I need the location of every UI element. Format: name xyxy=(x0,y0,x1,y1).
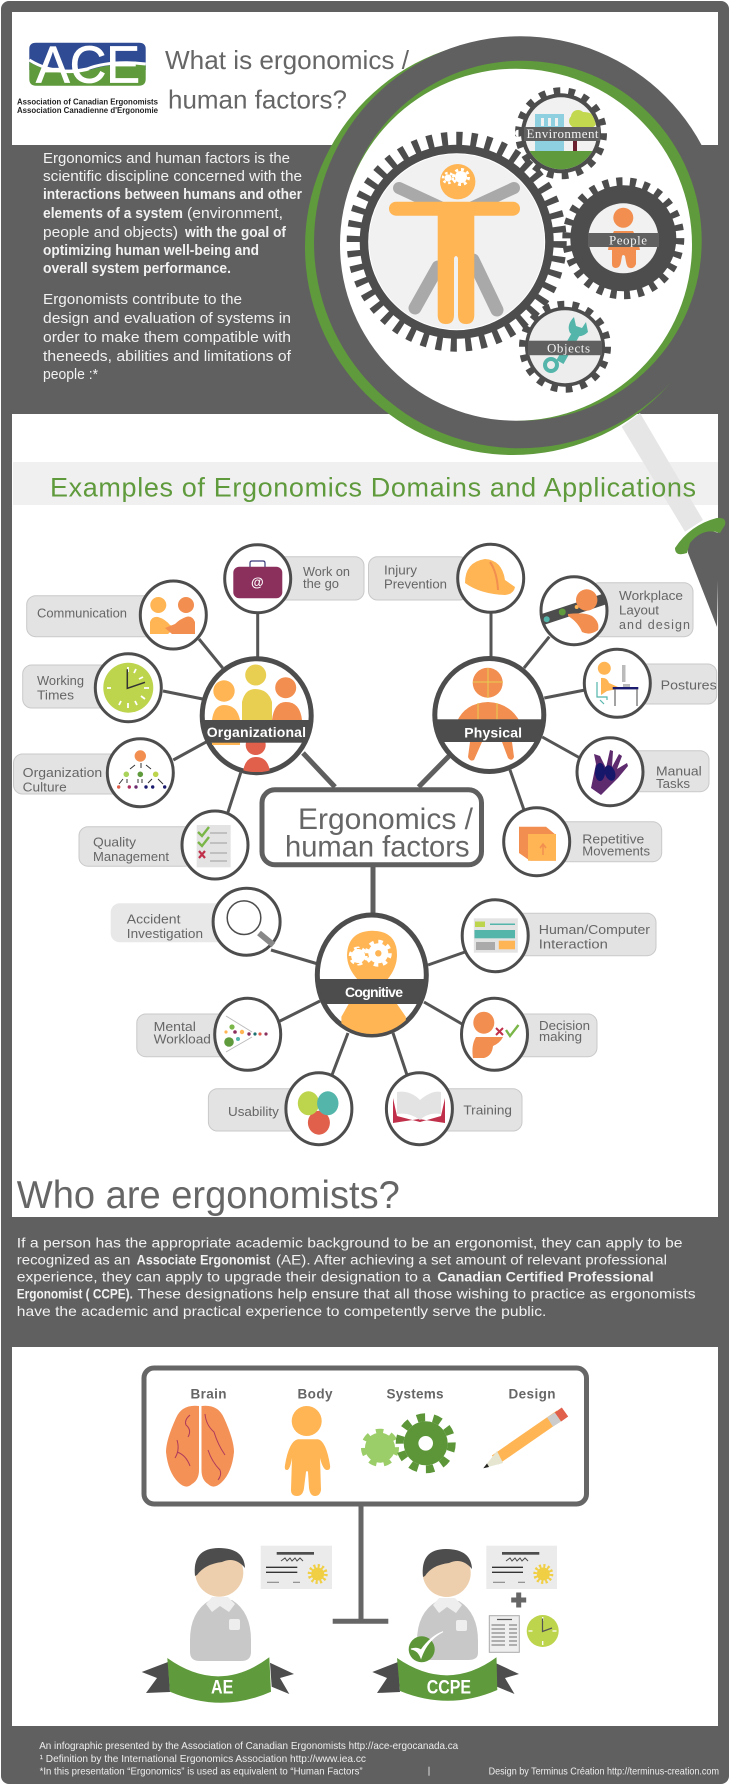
text block: who are ergonomists: experience, they can apply to upgrade their designation to a xyxy=(17,1268,431,1284)
ribbon: CCPE xyxy=(372,1657,519,1701)
pill: work on the go: Work on xyxy=(303,565,350,579)
node: accident magnifier xyxy=(213,888,280,955)
label: design: Design xyxy=(508,1386,556,1402)
logo: ACE: Association Canadienne d'Ergonomie xyxy=(17,106,159,115)
pill: postures xyxy=(630,664,717,704)
pill: injury prevention: Injury xyxy=(384,564,418,578)
pill: repetitive movements: Movements xyxy=(582,844,650,858)
node: communication xyxy=(140,581,206,649)
certificate: CCPE xyxy=(486,1546,557,1589)
icon: body xyxy=(285,1406,330,1496)
body xyxy=(417,1601,478,1660)
icon: document xyxy=(489,1616,519,1652)
pill: training xyxy=(430,1089,522,1131)
node: working times clock xyxy=(95,654,161,722)
icon: plus xyxy=(511,1592,526,1608)
hub: central box xyxy=(262,790,482,865)
text block: definition: (environment, xyxy=(187,205,283,222)
hub: central box: human factors xyxy=(285,831,470,864)
ribbon: AE: AE xyxy=(211,1678,233,1698)
text block: definition: optimizing human well-being and xyxy=(43,242,259,259)
pill: working times: Working xyxy=(37,674,84,688)
node: injury helmet xyxy=(458,544,524,612)
gear: objects: Objects xyxy=(547,340,590,356)
footer: credits: ¹ Definition by the International Ergonomics Association http://www.iea.cc xyxy=(40,1753,366,1765)
footer: credits: *In this presentation “Ergonomics” is used as equivalent to “Human Factors” xyxy=(40,1766,363,1778)
person: associate ergonomist xyxy=(190,1548,251,1661)
hub: physical xyxy=(430,658,550,772)
icon: clock xyxy=(527,1615,559,1647)
pill: work on the go: the go xyxy=(303,577,339,591)
pill: accident investigation xyxy=(111,903,231,942)
hub: cognitive xyxy=(315,915,430,1040)
pill: decision making xyxy=(510,1014,597,1057)
node: usability xyxy=(286,1073,352,1145)
panel: examples heading band xyxy=(13,462,718,505)
text block: definition: order to make them compatible with xyxy=(43,329,291,346)
ribbon: AE xyxy=(142,1657,294,1703)
text block: who are ergonomists: Canadian Certified Professional xyxy=(437,1268,654,1284)
node: repetitive movements box xyxy=(504,808,570,876)
footer divider xyxy=(428,1767,430,1776)
pill: work on the go xyxy=(270,557,364,600)
icon: check badge xyxy=(409,1632,443,1662)
pill: working times xyxy=(23,665,113,708)
node: postures xyxy=(584,649,650,717)
pill: communication xyxy=(27,596,157,637)
gear: human figure xyxy=(354,139,560,345)
gear: environment: Environment xyxy=(526,126,599,141)
text block: definition: design and evaluation of systems in xyxy=(43,310,291,327)
text block: definition: Ergonomics and human factors is the xyxy=(43,150,290,167)
face xyxy=(423,1549,471,1597)
node: quality checklist xyxy=(182,811,248,879)
pill: usability xyxy=(208,1089,308,1131)
hair xyxy=(195,1548,245,1576)
pill: manual tasks xyxy=(625,751,709,792)
gear: environment xyxy=(518,91,604,176)
person: certified ergonomist xyxy=(417,1549,478,1660)
magnifying lens xyxy=(305,36,726,455)
node: decision making xyxy=(462,998,528,1070)
footer: credits: An infographic presented by the Association of Canadian Ergonomists http://ace-ergocanada.ca xyxy=(39,1740,458,1752)
text block: who are ergonomists: have the academic and practical experience to competently serve the public. xyxy=(17,1303,546,1319)
pill: decision making: Decision xyxy=(539,1019,590,1033)
pill: training: Training xyxy=(463,1104,512,1118)
text block: definition xyxy=(43,150,302,383)
ribbon: CCPE: CCPE xyxy=(427,1678,471,1698)
pill: quality management: Quality xyxy=(93,836,137,850)
text block: who are ergonomists: Associate Ergonomist xyxy=(137,1252,271,1268)
pill: organization culture: Organization xyxy=(23,766,102,780)
pill: injury prevention xyxy=(368,557,468,600)
node: organization culture tree xyxy=(107,739,173,807)
pill: human computer xyxy=(510,913,656,956)
logo: ACE: Association of Canadian Ergonomists xyxy=(17,98,159,106)
hair xyxy=(423,1549,472,1577)
hub: cognitive: Cognitive xyxy=(345,984,403,1000)
title xyxy=(165,45,410,114)
hub: central box: Ergonomics / xyxy=(298,803,474,836)
node: training book xyxy=(386,1073,452,1145)
pill: usability: Usability xyxy=(228,1105,280,1119)
label: body: Body xyxy=(298,1386,333,1402)
pill: communication: Communication xyxy=(37,606,127,620)
board: skills xyxy=(144,1368,586,1504)
title: What is ergonomics / xyxy=(165,45,410,75)
text block: definition: elements of a system xyxy=(43,205,183,222)
icon: pencil xyxy=(483,1412,565,1468)
panel: requirements white xyxy=(12,1347,718,1726)
pill: quality management: Management xyxy=(93,850,170,864)
label: brain: Brain xyxy=(190,1386,226,1402)
magnifier handle xyxy=(622,413,725,627)
pill: workplace layout: Layout xyxy=(619,604,660,618)
pill: decision making: making xyxy=(539,1030,582,1044)
panel: domains white xyxy=(12,414,718,1217)
hub: organizational: Organizational xyxy=(207,724,306,740)
footer: credits xyxy=(39,1740,719,1778)
text block: who are ergonomists: recognized as an xyxy=(17,1252,130,1268)
pill: quality management xyxy=(79,827,194,866)
certificate: AE xyxy=(261,1546,332,1589)
connector lines xyxy=(163,613,585,1075)
text block: who are ergonomists: Ergonomist ( CCPE). xyxy=(17,1286,133,1302)
title: human factors? xyxy=(168,84,347,114)
pill: organization culture xyxy=(14,754,124,794)
text block: definition: overall system performance. xyxy=(43,260,231,277)
gear: people: People xyxy=(609,232,647,248)
node: work on the go xyxy=(225,545,291,613)
pill: postures: Postures xyxy=(661,678,717,692)
text block: definition: scientific discipline concerned with the xyxy=(43,168,302,185)
pill: manual tasks: Tasks xyxy=(656,777,690,791)
pill: accident investigation: Accident xyxy=(127,912,181,926)
logo: ACE: ACE xyxy=(36,36,140,94)
pill: injury prevention: Prevention xyxy=(384,578,447,592)
pill: mental workload: Workload xyxy=(154,1032,211,1046)
text block: definition: interactions between humans and other xyxy=(43,186,302,203)
node: workplace layout xyxy=(541,577,607,645)
body xyxy=(190,1600,251,1661)
pill: workplace layout: and design xyxy=(619,618,690,632)
text block: definition: Ergonomists contribute to the xyxy=(43,291,242,308)
icon: brain xyxy=(166,1406,234,1487)
panel: header white xyxy=(12,12,718,145)
node: manual tasks glove xyxy=(577,738,643,806)
board stem xyxy=(333,1506,388,1621)
gear: people xyxy=(567,182,680,295)
pill: repetitive movements xyxy=(550,822,662,862)
text block: definition: theneeds, abilities and limitations of xyxy=(43,348,292,365)
text block: who are ergonomists: If a person has the appropriate academic background to be an ergonomist, they can apply to be xyxy=(17,1234,683,1250)
text block: who are ergonomists: (AE). After achieving a set amount of relevant professional xyxy=(276,1252,667,1268)
heading: who are ergonomists: Who are ergonomists? xyxy=(17,1174,400,1217)
pill: manual tasks: Manual xyxy=(656,764,702,778)
text block: definition: with the goal of xyxy=(184,224,287,241)
pill: human computer: Human/Computer xyxy=(539,923,650,937)
text block: definition: people :* xyxy=(43,366,98,383)
text block: who are ergonomists xyxy=(17,1234,696,1319)
text block: definition: people and objects) xyxy=(43,224,178,241)
heading: examples: Examples of Ergonomics Domains and Applications xyxy=(50,473,696,503)
node: mental workload xyxy=(215,998,281,1070)
text block: who are ergonomists: These designations help ensure that all those wishing to practice as ergonomists xyxy=(138,1286,696,1302)
pill: mental workload: Mental xyxy=(154,1020,196,1034)
logo: ACE xyxy=(17,36,159,116)
label: systems: Systems xyxy=(386,1386,444,1402)
pill: mental workload xyxy=(137,1014,237,1057)
icon: gears xyxy=(364,1417,452,1469)
node: human computer interaction xyxy=(462,900,528,972)
face xyxy=(195,1549,243,1597)
pill: workplace layout xyxy=(590,583,693,637)
pill: working times: Times xyxy=(37,688,74,702)
pill: human computer: Interaction xyxy=(539,938,608,952)
pill: repetitive movements: Repetitive xyxy=(582,832,644,846)
hub: physical: Physical xyxy=(464,724,522,740)
node: work on the go: @ xyxy=(251,574,264,590)
gear: objects xyxy=(522,304,608,389)
pill: organization culture: Culture xyxy=(23,780,67,794)
pill: accident investigation: Investigation xyxy=(127,927,203,941)
pill: workplace layout: Workplace xyxy=(619,589,683,603)
hub: organizational xyxy=(195,659,320,773)
